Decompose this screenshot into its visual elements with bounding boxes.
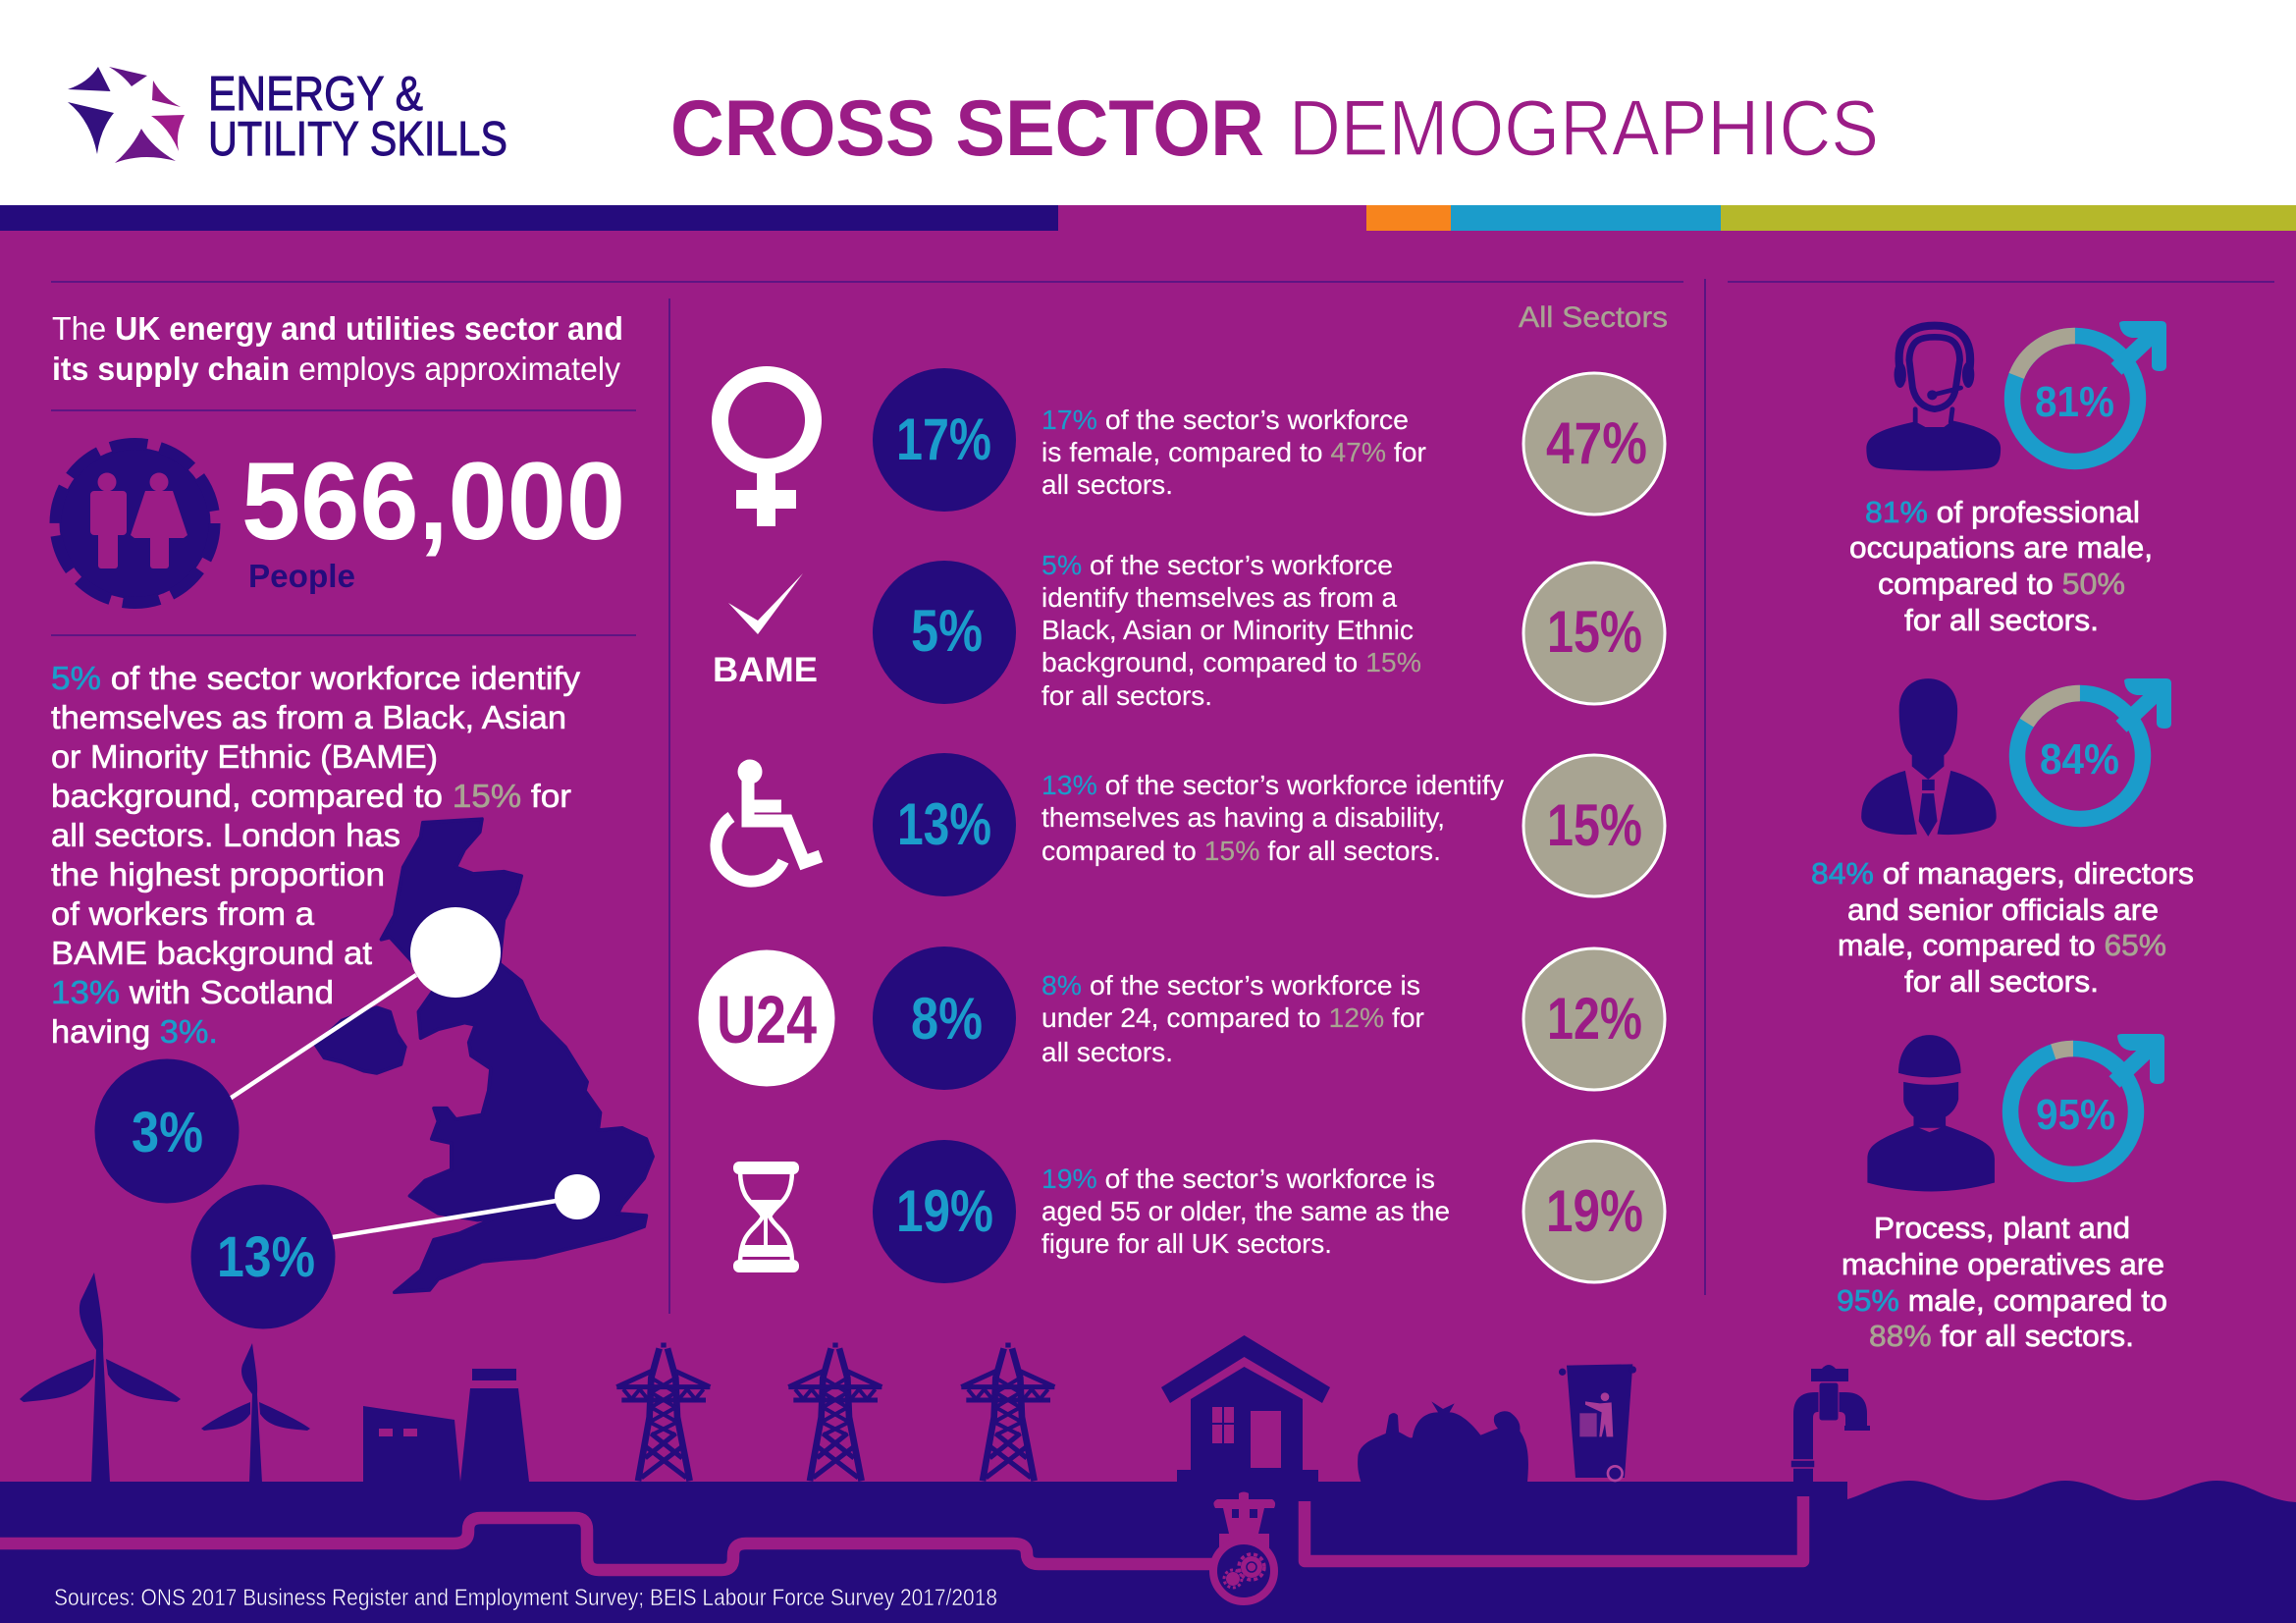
row: under 24 [699,947,1665,1090]
BAME text: or Minority Ethnic (BAME) [51,738,438,775]
icon: factory and chimney [363,1369,529,1482]
stat: 19% all sectors [1523,1141,1665,1282]
stat: 15% all sectors: 15% [1547,599,1642,665]
text: process operatives: machine operatives are [1842,1247,2164,1281]
row: BAME [713,550,1665,711]
callout: Scotland [94,907,501,1204]
chart: male ring 84%: 84% [2040,735,2119,784]
text: professional occupations: for all sectors. [1904,603,2099,637]
BAME text [51,660,581,1050]
icon: pylon 1 [616,1345,710,1481]
text: process operatives [1837,1211,2167,1353]
logo: Energy & Utility Skills [68,67,507,166]
text: BAME: 5% of the sector’s workforce [1041,550,1393,580]
logo star [68,67,185,163]
group: professional occupations [1849,317,2166,637]
icon: pylon 2 [788,1345,881,1481]
text: disability: themselves as having a disability, [1041,802,1445,833]
header band [0,0,2296,205]
stat: 47% all sectors [1523,373,1665,514]
text: aged 55: figure for all UK sectors. [1041,1228,1332,1259]
icon: tap [1790,1365,1870,1482]
text: female: all sectors. [1041,469,1173,500]
icon: wheelchair [716,760,821,882]
stat: 5%: 5% [911,598,983,664]
text: BAME: identify themselves as from a [1041,582,1397,613]
text: professional occupations: occupations are male, [1849,530,2153,565]
text: disability: 13% of the sector’s workforce identify [1041,770,1504,800]
text: aged 55 [1041,1163,1450,1259]
text: under 24: under 24, compared to 12% for [1041,1002,1424,1033]
text: managers: male, compared to 65% [1838,928,2166,962]
icon: hourglass [733,1162,799,1272]
icon: person with headset [1866,326,2001,470]
stat: 8%: 8% [911,986,983,1052]
text: managers: 84% of managers, directors [1811,856,2194,891]
stat: 19% all sectors: 19% [1546,1178,1643,1244]
text: disability: compared to 15% for all sectors. [1041,836,1441,866]
text: process operatives: Process, plant and [1874,1211,2130,1245]
stat: 13%: 13% [897,791,991,857]
intro text: The UK energy and utilities sector and [52,310,623,347]
stat: 17% [873,368,1016,512]
BAME text: the highest proportion [51,856,385,893]
chart: male ring 81%: 81% [2035,378,2114,426]
text: under 24: 8% of the sector’s workforce is [1041,970,1420,1001]
icon: BAME check mark [713,573,818,689]
heading: All Sectors: All Sectors [1519,301,1668,334]
text: professional occupations: 81% of professional [1865,495,2140,529]
logo wordmark: UTILITY SKILLS [208,113,507,166]
text: female: is female, compared to 47% for [1041,437,1426,467]
text: professional occupations [1849,495,2153,637]
people label: People [248,558,355,594]
icon: large wind turbine [20,1272,181,1483]
stat: 13% [873,753,1016,896]
icon: BAME check mark: BAME [713,651,818,689]
stat: 47% all sectors: 47% [1546,410,1647,476]
icon: pipe valve with gears [1213,1492,1275,1601]
stat: 15% all sectors [1523,563,1665,704]
stat: 8% [873,947,1016,1090]
stat: 19%: 19% [896,1178,993,1244]
group: process operatives [1837,1032,2167,1353]
stat: 15% all sectors: 15% [1547,792,1642,858]
group: managers [1811,670,2194,999]
icon: U24 badge [699,950,834,1086]
chart: male ring 84% [1994,670,2171,842]
stat: 12% all sectors [1523,948,1665,1090]
BAME text: background, compared to 15% for [51,778,571,814]
chart: male ring 81% [1994,317,2166,480]
panel: workforce size [52,310,625,603]
title: DEMOGRAPHICS [1289,84,1879,173]
text: under 24 [1041,970,1424,1067]
icon: U24 badge: U24 [717,982,817,1057]
icon: rubbish bags [1358,1401,1528,1483]
callout: Scotland: 3% [132,1101,203,1164]
pipeline [0,1496,1803,1570]
row: female [712,366,1665,526]
text: managers [1811,856,2194,999]
stat: 5% [873,561,1016,704]
chart: male ring 95% [1994,1032,2164,1191]
sea [1847,1481,2296,1623]
title: CROSS SECTOR [670,84,1264,173]
logo wordmark: ENERGY & [208,68,423,121]
callout: London: 13% [217,1225,315,1289]
ground [0,1482,1847,1623]
text: process operatives: 88% for all sectors. [1869,1319,2134,1353]
icon: small wind turbine [201,1343,310,1483]
BAME text: of workers from a [51,895,315,932]
row: aged 55 [733,1140,1665,1283]
stat: 12% all sectors: 12% [1547,986,1642,1052]
chart: male ring 95%: 95% [2036,1091,2115,1139]
BAME text: themselves as from a Black, Asian [51,699,566,735]
BAME text: 13% with Scotland [51,974,334,1010]
text: BAME [1041,550,1421,711]
text: female: 17% of the sector’s workforce [1041,405,1409,435]
text: professional occupations: compared to 50% [1878,567,2125,601]
intro text: its supply chain employs approximately [52,351,620,387]
BAME text: 5% of the sector workforce identify [51,660,581,696]
stat: 17%: 17% [896,406,991,472]
colour strip [0,205,2296,231]
text: aged 55: aged 55 or older, the same as the [1041,1196,1450,1226]
panel: diversity comparison [699,301,1668,1283]
sources: Sources: ONS 2017 Business Register and Employment Survey; BEIS Labour Force Survey 2017/2018 [54,1585,997,1611]
BAME text: having 3%. [51,1013,218,1050]
intro text [52,310,623,387]
text: BAME: Black, Asian or Minority Ethnic [1041,615,1414,645]
text: female [1041,405,1426,500]
text: BAME: for all sectors. [1041,680,1212,711]
text: aged 55: 19% of the sector’s workforce is [1041,1163,1435,1194]
text: under 24: all sectors. [1041,1037,1173,1067]
icon: female symbol [712,366,822,526]
text: managers: and senior officials are [1847,893,2159,927]
BAME text: BAME background at [51,935,372,971]
text: disability [1041,770,1504,866]
icon: wheelie bin [1559,1364,1636,1481]
title [670,84,1879,173]
BAME text: all sectors. London has [51,817,400,853]
icon: pylon 3 [961,1345,1054,1481]
text: BAME: background, compared to 15% [1041,647,1421,677]
text: managers: for all sectors. [1904,964,2099,999]
callout: London [190,1174,600,1329]
map of UK [315,819,653,1292]
icon: house [1161,1335,1330,1482]
panel: male share by occupation [1811,317,2194,1353]
panel: BAME and UK map [51,660,653,1329]
row: disability [716,753,1665,896]
logo wordmark [208,68,507,166]
big number: 566,000 [241,440,625,563]
stat: 15% all sectors [1523,755,1665,896]
icon: gear with man and woman [55,444,214,603]
text: process operatives: 95% male, compared to [1837,1283,2167,1318]
icon: person in hard hat [1867,1035,1995,1191]
panel: utility landscape [0,1272,2296,1623]
icon: person in suit [1861,678,1997,837]
stat: 19% [873,1140,1016,1283]
